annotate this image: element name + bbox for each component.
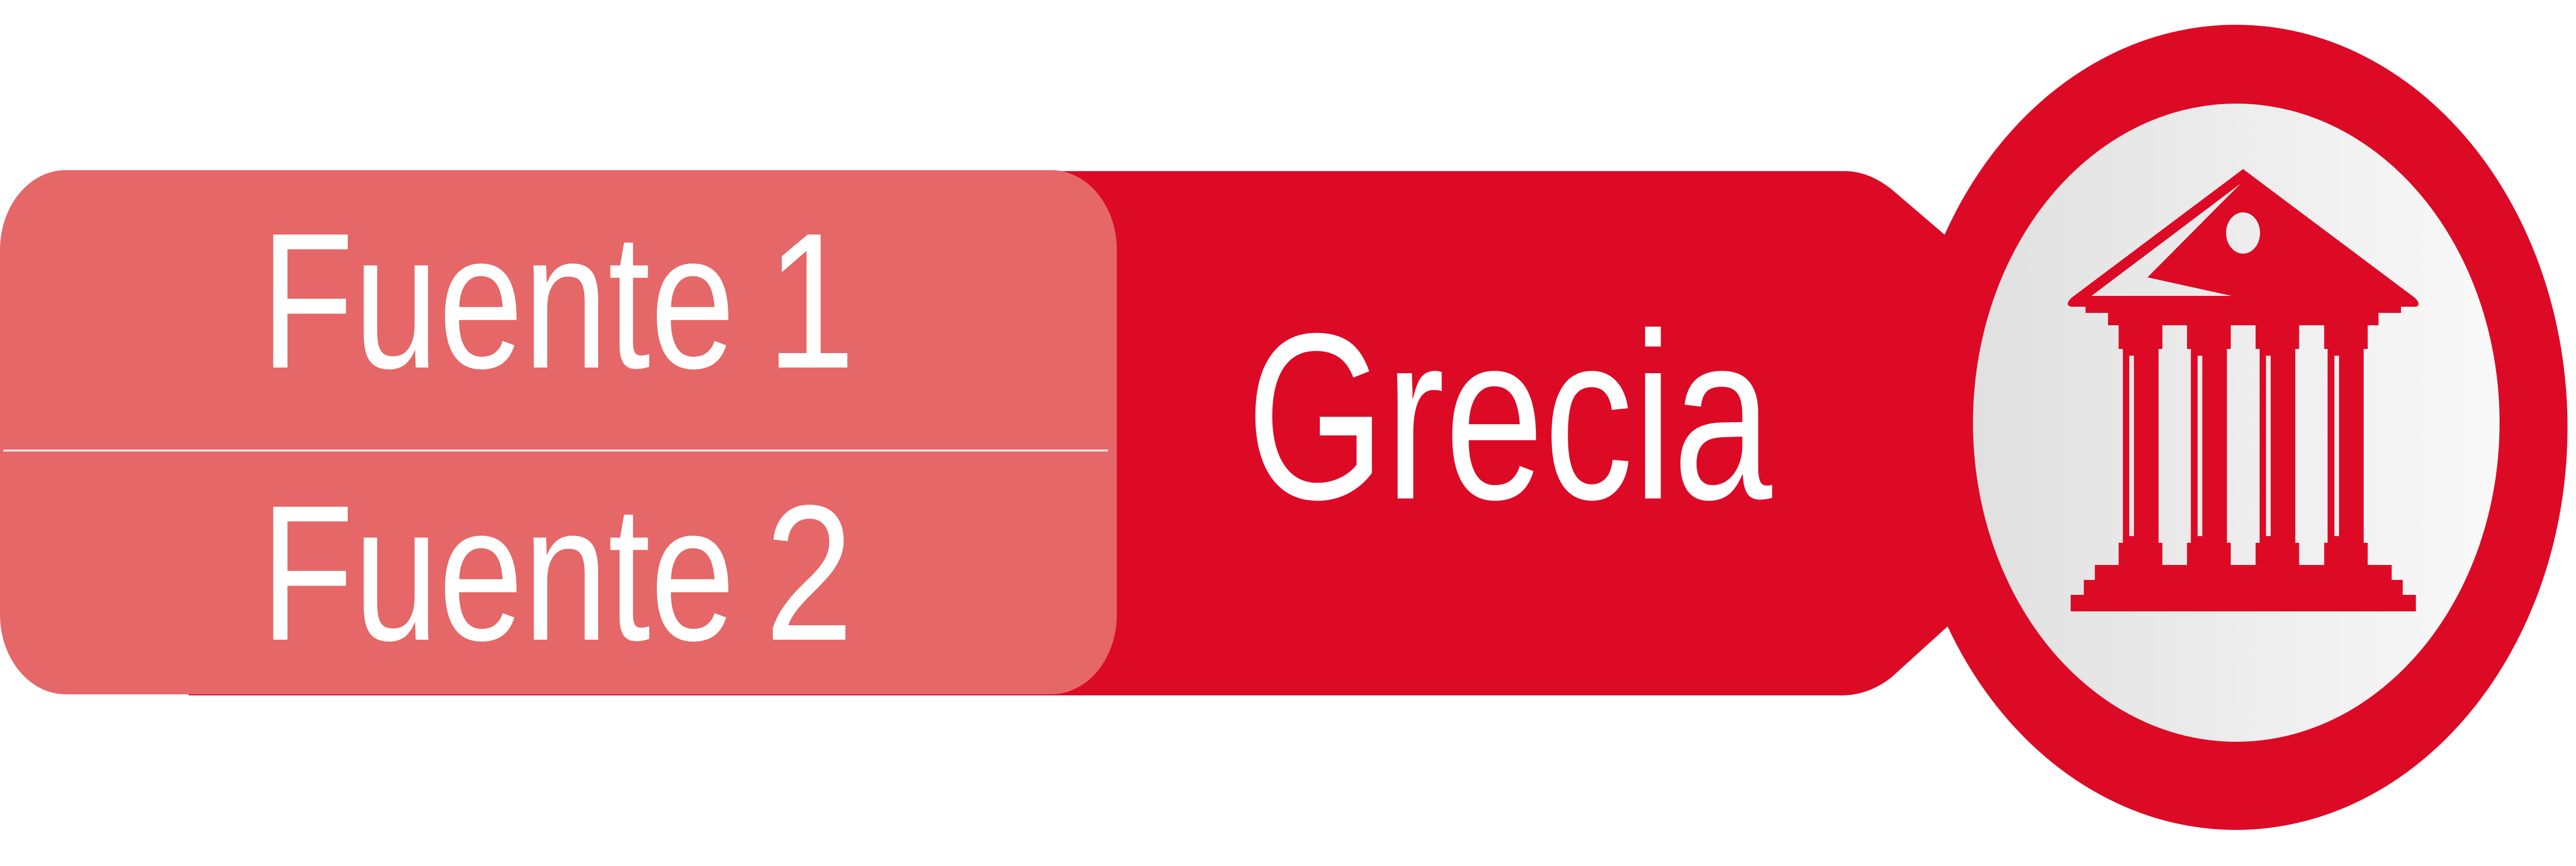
outer red circle xyxy=(1904,25,2568,830)
icon: greek temple xyxy=(2067,169,2419,611)
source label: Fuente 2: Fuente xyxy=(261,465,735,681)
heading: Grecia: Grecia xyxy=(1246,284,1773,549)
source label: Fuente 2: 2 xyxy=(765,465,853,681)
panel: sources xyxy=(0,170,1117,694)
inner disc with grey gradient xyxy=(1973,104,2500,742)
source label: Fuente 1: Fuente xyxy=(261,193,735,409)
red banner xyxy=(189,171,1954,695)
source label: Fuente 1: 1 xyxy=(767,193,855,409)
panel background xyxy=(0,170,1117,694)
